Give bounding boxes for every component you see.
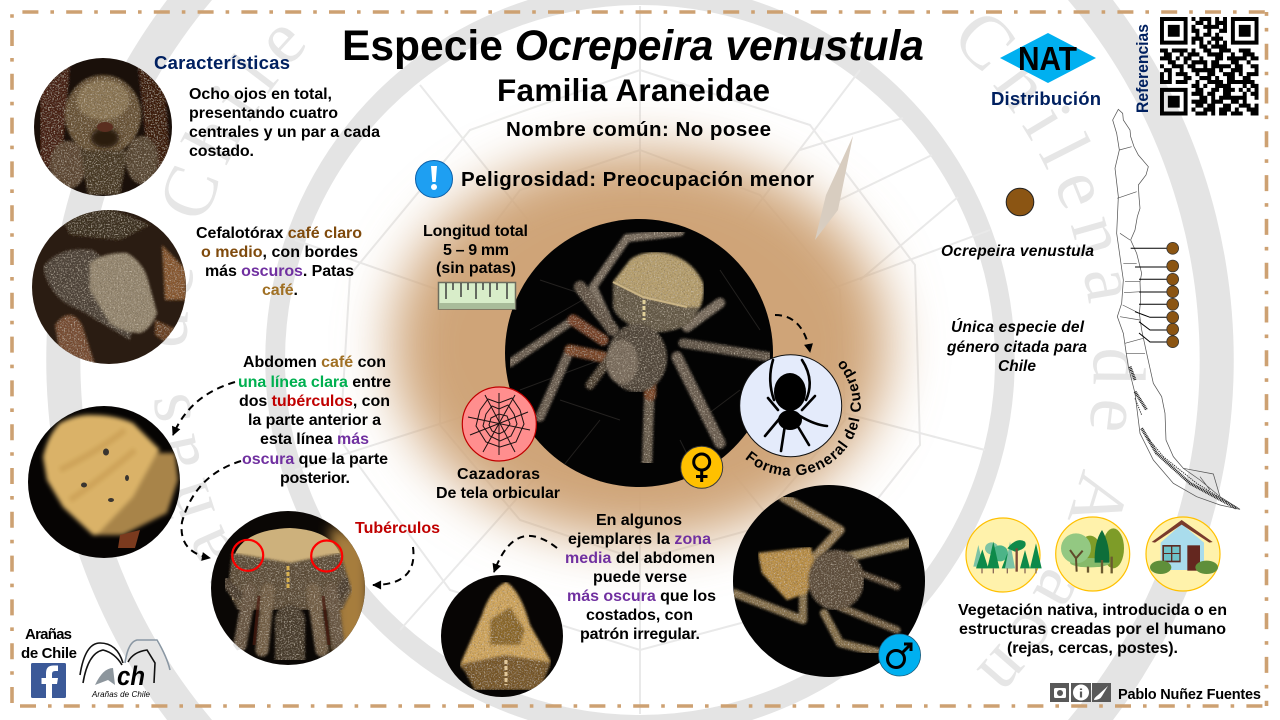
label: spiders of Chile: de Chile — [21, 645, 77, 662]
icon: native forest — [966, 518, 1042, 592]
marker: tubercle circles — [232, 540, 342, 572]
text: eyes: Ocho ojos en total, — [189, 86, 332, 103]
label: body shape curved: Forma General del Cuerpo — [746, 361, 861, 476]
text: mid abdomen: ejemplares la zona — [568, 531, 711, 548]
hunter type text — [436, 466, 560, 502]
text: habitat: estructuras creadas por el humano — [959, 621, 1226, 638]
credit icons — [1050, 683, 1111, 702]
text: habitat — [958, 602, 1227, 657]
label: spiders of Chile — [21, 626, 77, 662]
label: tubercles: Tubérculos — [355, 520, 440, 537]
icon: ruler — [438, 282, 516, 309]
QR code — [1160, 19, 1258, 114]
common name: Nombre común: No posee — [506, 118, 771, 141]
icon: NAT diamond — [1000, 33, 1096, 83]
text: mid abdomen: costados, con — [586, 607, 693, 624]
icon: house — [1146, 517, 1220, 591]
photo: cephalothorax — [30, 208, 188, 366]
photo: abdomen detail — [26, 403, 182, 560]
text: mid abdomen: puede verse — [593, 569, 687, 586]
icon: male badge — [879, 634, 921, 676]
text: abdomen: posterior. — [280, 470, 350, 487]
text: abdomen — [238, 354, 391, 487]
map markers with leader lines — [1131, 242, 1179, 348]
icon: exclamation — [416, 160, 452, 198]
credit text: Pablo Nuñez Fuentes — [1118, 687, 1261, 703]
arrow: abdomen text to abdomen photo — [173, 382, 235, 435]
length text: Longitud total — [423, 223, 528, 240]
hunter type text: De tela orbicular — [436, 485, 560, 502]
icon: introduced trees — [1056, 517, 1130, 591]
text: abdomen: Abdomen café con — [243, 354, 386, 371]
icon: body silhouette — [740, 355, 842, 457]
text: cephalothorax — [196, 225, 362, 299]
length text: 5 – 9 mm — [443, 242, 509, 259]
text: eyes: costado. — [189, 143, 254, 160]
icon: facebook — [31, 663, 66, 698]
label: references: Referencias — [1133, 24, 1152, 113]
label: spiders of Chile: Arañas — [25, 626, 72, 643]
genus note — [946, 318, 1087, 375]
text: abdomen: esta línea más — [260, 431, 369, 448]
arrow: to body silhouette — [775, 315, 810, 352]
text: abdomen: una línea clara entre — [238, 374, 391, 391]
text: abdomen: oscura que la parte — [242, 451, 388, 468]
length text — [423, 223, 528, 277]
photo: male spider — [731, 483, 927, 679]
genus note: Única especie del — [951, 318, 1085, 336]
text: habitat: Vegetación nativa, introducida o en — [958, 602, 1227, 619]
arrow: mid abdomen text to photo — [494, 536, 557, 572]
icon: spider web — [462, 387, 536, 461]
text: eyes — [189, 86, 380, 160]
logo: Aracnología de Chile: Arañas de Chile — [91, 690, 151, 699]
background: watermark seal: Chilena de Aracn — [960, 16, 1146, 686]
photo: main female spider — [503, 217, 775, 490]
photo: front view with tubercles — [209, 509, 370, 667]
length text: (sin patas) — [436, 260, 516, 277]
family heading: Familia Araneidae — [497, 72, 770, 108]
text: mid abdomen — [565, 512, 716, 643]
title: Especie Ocrepeira venustula — [342, 22, 924, 70]
text: abdomen: dos tubérculos, con — [239, 393, 390, 410]
arrow: tubercles label to photo — [373, 547, 414, 585]
text: cephalothorax: o medio, con bordes — [201, 244, 358, 261]
text: habitat: (rejas, cercas, postes). — [1007, 640, 1178, 657]
photo: mid abdomen — [439, 573, 565, 700]
text: mid abdomen: En algunos — [596, 512, 682, 529]
background: tan central glow — [392, 150, 888, 540]
text: mid abdomen: media del abdomen — [565, 550, 715, 567]
text: abdomen: la parte anterior a — [248, 412, 381, 429]
text: eyes: presentando cuatro — [189, 105, 338, 122]
background: gray spider leg — [815, 136, 853, 240]
text: cephalothorax: más oscuros. Patas — [205, 263, 354, 280]
species label: Ocrepeira venustula — [941, 243, 1094, 260]
photo: eyes — [34, 58, 172, 196]
hunter type text: Cazadoras — [457, 466, 540, 483]
genus note: género citada para — [946, 339, 1087, 356]
map: Chile — [1113, 109, 1240, 509]
background: watermark seal: Arañas de Chile — [154, 28, 305, 650]
legend dot — [1006, 188, 1034, 216]
genus note: Chile — [998, 358, 1036, 375]
text: cephalothorax: Cefalotórax café claro — [196, 225, 362, 242]
text: cephalothorax: café. — [262, 282, 298, 299]
text: eyes: centrales y un par a cada — [189, 124, 380, 141]
logo: Aracnología de Chile — [80, 640, 170, 699]
text: mid abdomen: más oscura que los — [567, 588, 716, 605]
danger level — [416, 160, 814, 198]
icon: female badge — [681, 446, 723, 488]
text: mid abdomen: patrón irregular. — [580, 626, 700, 643]
icon: NAT diamond: NAT — [1018, 40, 1077, 77]
heading: distribution: Distribución — [991, 88, 1101, 109]
logo: Aracnología de Chile: ch — [117, 661, 145, 691]
arrow: abdomen text to front photo — [182, 461, 241, 558]
danger text: Peligrosidad: Preocupación menor — [461, 168, 814, 191]
heading: characteristics: Características — [154, 52, 290, 73]
